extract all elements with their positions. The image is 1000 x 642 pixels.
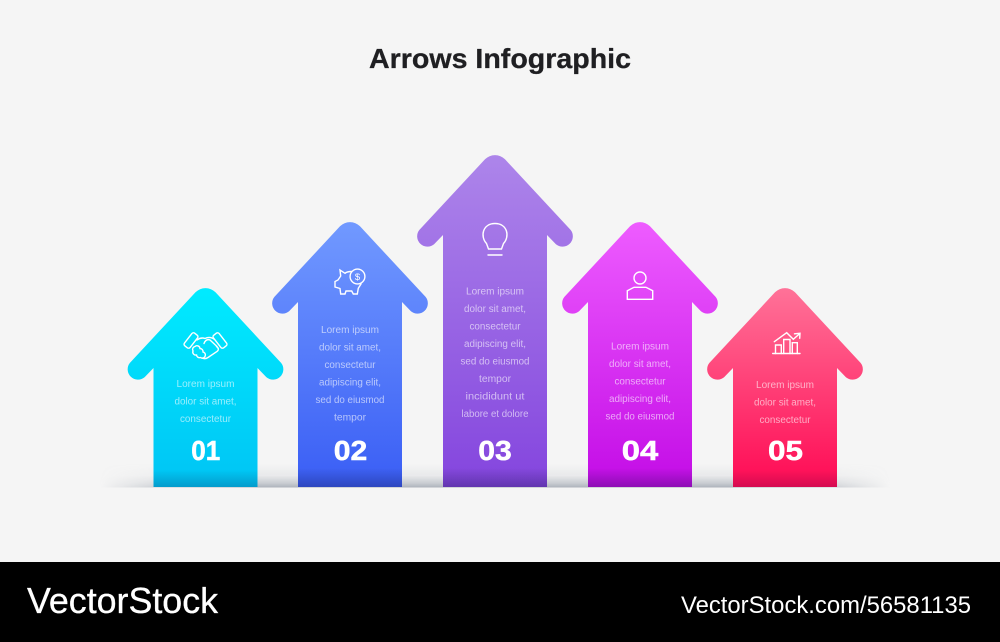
icon: piggy bank: $ [355,272,361,283]
text block 03: sed do eiusmod [460,356,530,368]
text block 03: incididunt ut [466,392,525,402]
text block 02: Lorem ipsum [321,325,379,336]
text block 02 [316,325,384,424]
text block 04: sed do eiusmod [606,412,674,422]
arrow shape 02 [272,222,428,487]
icon: piggy bank [335,269,365,294]
number 02: 02 [334,435,367,466]
text block 01: Lorem ipsum [176,379,234,390]
text block 04 [606,342,674,422]
number 03: 03 [478,435,512,466]
text block 03: dolor sit amet, [464,304,526,315]
text block 03: tempor [479,374,512,385]
text block 02: adipiscing elit, [319,378,381,388]
text block 01: consectetur [180,414,232,425]
text block 03: adipiscing elit, [464,339,526,350]
text block 03: consectetur [470,322,521,332]
text block 03: labore et dolore [462,409,529,420]
text block 05 [754,380,816,426]
text block 04: dolor sit amet, [609,359,671,370]
floor shadow [112,471,878,488]
icon: light bulb [483,224,507,255]
text block 02: dolor sit amet, [319,342,381,354]
footer band [0,562,1000,642]
icon: person [627,272,653,299]
text block 03 [460,286,530,420]
number 04: 04 [622,435,659,466]
text block 01: dolor sit amet, [174,396,236,408]
icon: handshake [183,332,228,359]
text block 04: consectetur [614,376,666,388]
text block 04: adipiscing elit, [609,394,671,405]
arrow shape 03 [417,155,573,487]
footer image id: VectorStock.com/56581135 [681,592,971,619]
footer logo: VectorStock [27,580,219,621]
number 05: 05 [768,435,803,466]
arrow shape 04 [562,222,718,487]
text block 02: consectetur [324,360,376,371]
panel: arrow 03 [417,155,573,487]
text block 02: sed do eiusmod [316,395,384,406]
arrow shape 05 [707,288,863,487]
text block 02: tempor [334,412,367,424]
panel: arrow 01 [128,288,283,487]
text block 05: dolor sit amet, [754,398,816,408]
text block 05: consectetur [760,415,811,426]
number 01: 01 [191,435,220,466]
text block 04: Lorem ipsum [611,342,669,352]
panel: arrow 04 [562,222,718,487]
text block 03: Lorem ipsum [466,286,524,298]
text block 05: Lorem ipsum [756,380,814,391]
arrow shape 01 [128,288,283,487]
text block 01 [174,379,236,425]
panel: arrow 02 [272,222,428,487]
title: Arrows Infographic [369,43,631,74]
icon: growth chart [773,333,800,354]
panel: arrow 05 [707,288,863,487]
